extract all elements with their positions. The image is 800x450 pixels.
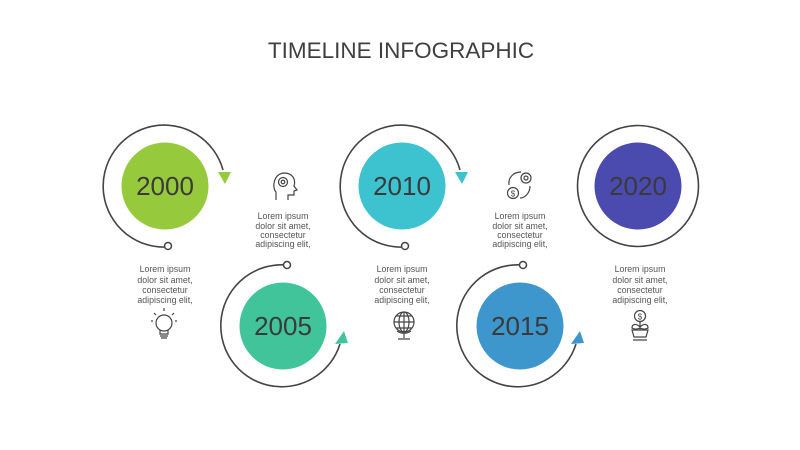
text block 2000: consectetur — [142, 285, 188, 295]
milestone: 2000 — [103, 125, 231, 250]
text block 2020: consectetur — [617, 285, 663, 295]
icon: plant with coin — [632, 310, 648, 340]
text block 2015 — [492, 211, 548, 249]
text block 2015: adipiscing elit, — [492, 239, 548, 249]
text block 2010: consectetur — [379, 285, 425, 295]
text block 2010: adipiscing elit, — [374, 295, 430, 305]
text block 2020: adipiscing elit, — [612, 295, 668, 305]
text block 2005 — [255, 211, 311, 249]
milestone: 2020: 2020 — [609, 171, 667, 201]
milestone: 2010: 2010 — [373, 171, 431, 201]
text block 2005: Lorem ipsum — [258, 211, 308, 221]
text block 2020 — [612, 264, 668, 305]
milestone: 2020 — [578, 126, 698, 246]
text block 2010: Lorem ipsum — [377, 264, 427, 274]
milestone: 2015: 2015 — [491, 311, 549, 341]
icon: light bulb — [151, 308, 177, 338]
milestone: 2000: 2000 — [136, 171, 194, 201]
text block 2015: dolor sit amet, — [492, 221, 548, 231]
icon: plant with coin: $ — [638, 312, 643, 322]
milestone: 2015 — [457, 262, 584, 387]
text block 2015: consectetur — [497, 230, 543, 240]
text block 2000: adipiscing elit, — [137, 295, 193, 305]
text block 2005: dolor sit amet, — [255, 221, 311, 231]
icon: money and gear cycle — [508, 172, 531, 198]
title: TIMELINE INFOGRAPHIC — [268, 38, 534, 63]
text block 2020: dolor sit amet, — [612, 275, 668, 285]
text block 2010 — [374, 264, 430, 305]
icon: head with gear — [274, 173, 297, 200]
milestone: 2010 — [340, 125, 468, 250]
text block 2000: Lorem ipsum — [140, 264, 190, 274]
icon: globe — [394, 312, 414, 339]
text block 2000 — [137, 264, 193, 305]
text block 2005: consectetur — [260, 230, 306, 240]
text block 2020: Lorem ipsum — [615, 264, 665, 274]
text block 2000: dolor sit amet, — [137, 275, 193, 285]
milestone: 2005: 2005 — [254, 311, 312, 341]
milestone: 2005 — [221, 262, 348, 387]
text block 2010: dolor sit amet, — [374, 275, 430, 285]
text block 2005: adipiscing elit, — [255, 239, 311, 249]
text block 2015: Lorem ipsum — [495, 211, 545, 221]
icon: money and gear cycle: $ — [511, 190, 516, 198]
